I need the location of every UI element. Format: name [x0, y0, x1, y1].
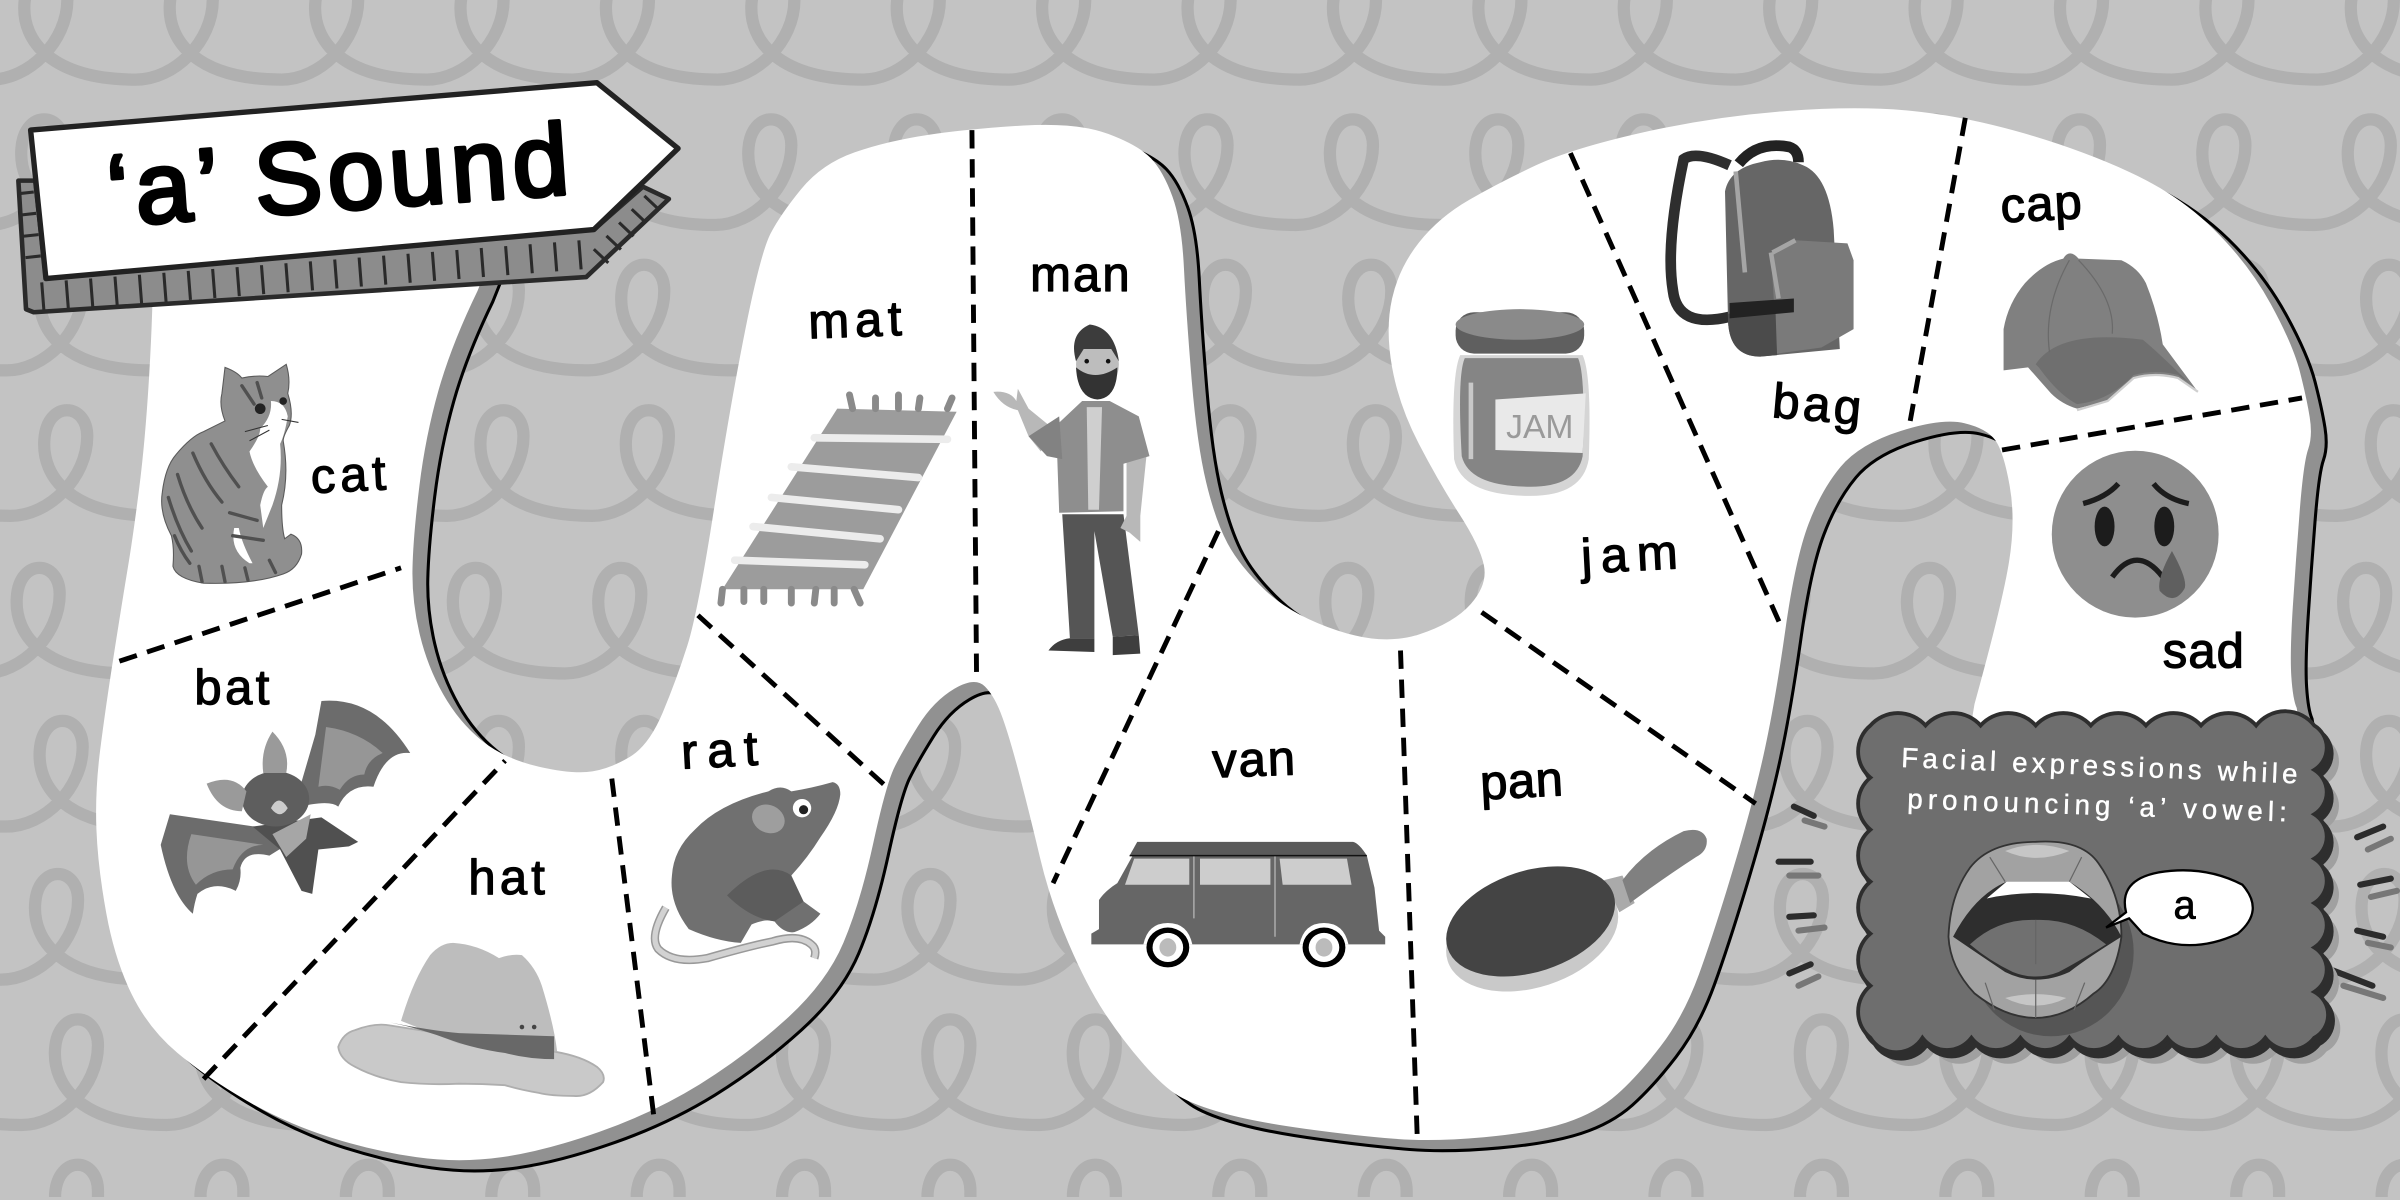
label: jam: jam	[1578, 525, 1679, 584]
icon: sad face	[2052, 451, 2219, 618]
icon: cat	[162, 364, 302, 583]
label: cap: cap	[1999, 175, 2083, 233]
label: rat: rat	[680, 722, 759, 780]
icon: bat	[161, 701, 410, 914]
icon: mat	[721, 395, 957, 603]
panel: facial expressions card	[1858, 711, 2340, 1066]
emphasis ticks: left	[1779, 807, 1824, 986]
icon: man	[993, 324, 1149, 655]
label: bag: bag	[1770, 374, 1863, 436]
icon: backpack	[1671, 146, 1854, 357]
emphasis ticks: right	[2333, 827, 2397, 998]
icon: pan	[1431, 830, 1707, 1012]
card text: Facial expressions while	[1901, 742, 2298, 789]
label: mat: mat	[807, 292, 903, 349]
label: pan: pan	[1479, 752, 1564, 811]
label: bat: bat	[194, 661, 270, 715]
label: van: van	[1211, 732, 1296, 788]
title banner	[18, 83, 678, 312]
speech bubble: a	[2173, 883, 2196, 927]
card text	[1901, 742, 2298, 827]
icon: jam jar	[1453, 309, 1590, 496]
icon: jam jar: JAM	[1506, 409, 1573, 446]
label: sad: sad	[2163, 624, 2244, 678]
icon: cap	[2004, 253, 2198, 410]
dashed dividers	[119, 118, 2302, 1140]
heading: ‘a’ Sound	[103, 104, 572, 248]
icon: open mouth	[1948, 841, 2134, 1036]
icon: hat	[338, 943, 604, 1096]
card text: pronouncing ‘a’ vowel:	[1907, 783, 2287, 827]
label: cat: cat	[309, 446, 388, 504]
label: man: man	[1030, 248, 1130, 302]
label: hat: hat	[468, 851, 545, 905]
speech bubble	[2106, 870, 2253, 945]
icon: rat	[655, 782, 840, 960]
icon: van	[1091, 842, 1385, 967]
